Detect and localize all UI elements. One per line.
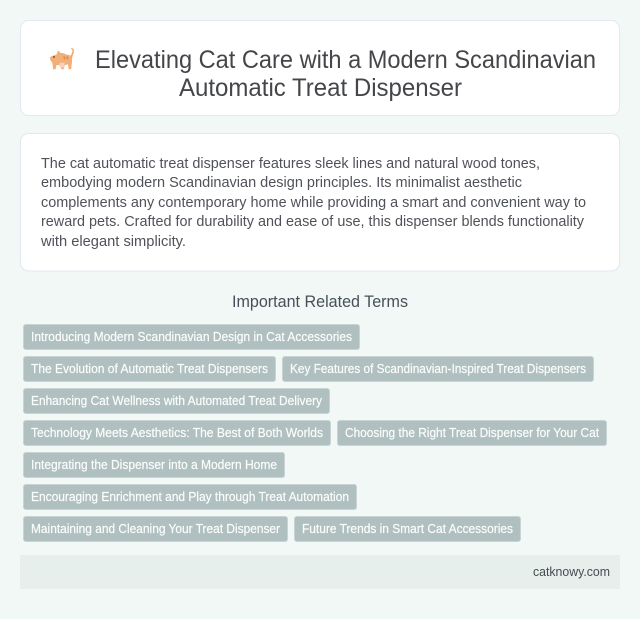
tag (294, 516, 520, 542)
tag: Encouraging Enrichment and Play through Treat Automation (31, 490, 349, 504)
tag (24, 516, 288, 542)
text block: description (40, 156, 586, 250)
icon: cat (50, 48, 74, 69)
tag: Technology Meets Aesthetics: The Best of Both Worlds (31, 426, 323, 440)
tag: Integrating the Dispenser into a Modern Home (31, 458, 277, 472)
panel: title card (20, 20, 620, 116)
tag (282, 356, 594, 382)
footer (20, 555, 620, 589)
text block: description: The cat automatic treat dispenser features sleek lines and natural wood tones, (41, 156, 540, 172)
tag: Introducing Modern Scandinavian Design in Cat Accessories (31, 330, 352, 344)
title (95, 46, 596, 102)
tag (24, 388, 330, 414)
tag (24, 324, 360, 350)
tag: Key Features of Scandinavian-Inspired Treat Dispensers (290, 362, 586, 376)
text block: description: reward pets. Crafted for durability and ease of use, this dispenser blends functionality (41, 214, 585, 230)
tag: The Evolution of Automatic Treat Dispensers (31, 362, 268, 376)
tag (338, 420, 606, 446)
title: Automatic Treat Dispenser (179, 74, 462, 102)
text block: description: complements any contemporary home while providing a smart and convenient way to (41, 195, 586, 211)
tag (24, 484, 356, 510)
tags: related terms (24, 324, 606, 542)
tag: Maintaining and Cleaning Your Treat Dispenser (31, 522, 280, 536)
text block: description: embodying modern Scandinavian design principles. Its minimalist aesthetic (41, 175, 522, 191)
tag (24, 356, 276, 382)
tag (24, 452, 284, 478)
text block: description: with elegant simplicity. (40, 234, 186, 250)
tag: Choosing the Right Treat Dispenser for Your Cat (345, 426, 599, 440)
heading: related terms: Important Related Terms (232, 293, 408, 311)
panel: description (20, 134, 620, 271)
tag (24, 420, 330, 446)
tag: Enhancing Cat Wellness with Automated Treat Delivery (31, 394, 323, 408)
tag: Future Trends in Smart Cat Accessories (302, 522, 513, 536)
title: Elevating Cat Care with a Modern Scandinavian (95, 46, 596, 74)
footer source: catknowy.com (533, 565, 610, 579)
